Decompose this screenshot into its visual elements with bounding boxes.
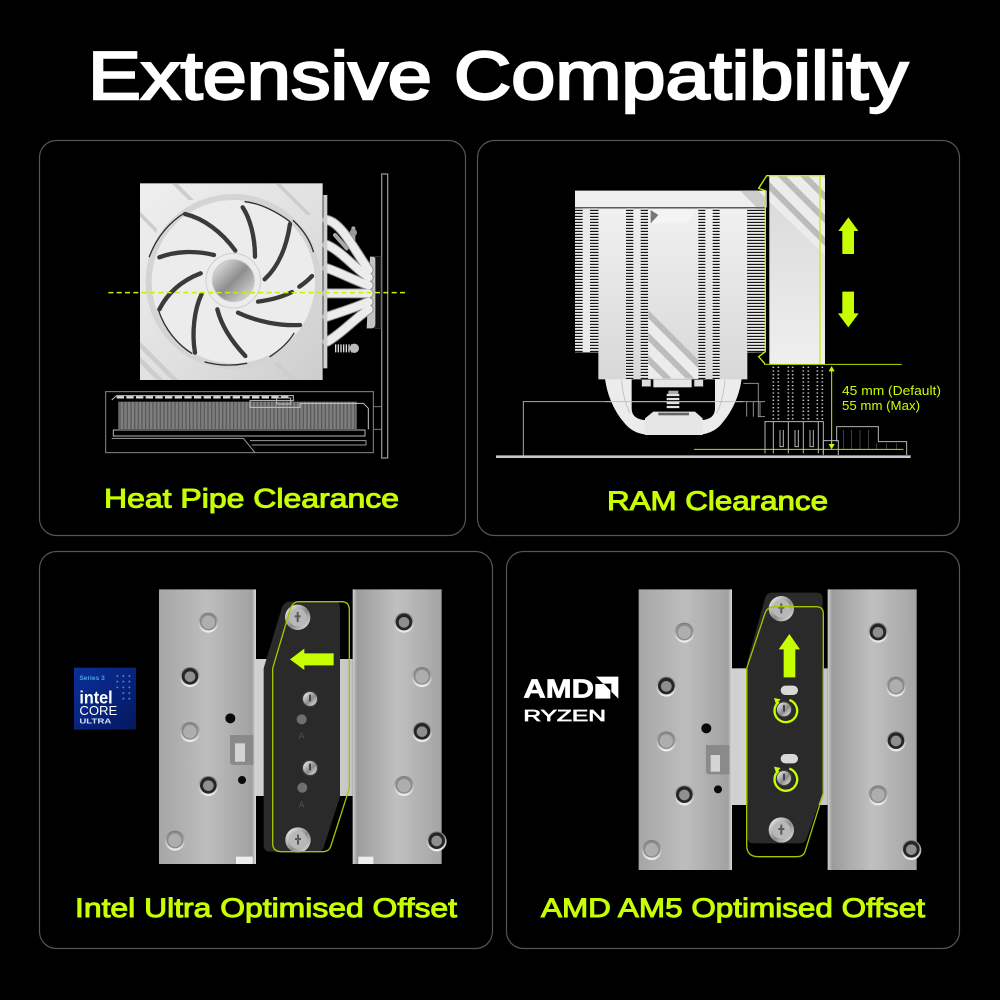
- illustration: Intel mounting bracket on heatsinks: [159, 589, 447, 864]
- dashed centre line: [108, 290, 408, 295]
- panel: RAM clearance: [478, 140, 960, 536]
- illustration: cooler side view with RAM clearance: [496, 176, 911, 457]
- fan frame: [140, 183, 323, 380]
- bracket details: A: [299, 731, 305, 741]
- logo: Intel Core Ultra: Series 3: [79, 675, 105, 682]
- clearance line: [694, 364, 903, 449]
- heatsink left: [159, 589, 256, 864]
- green outline of fan: [759, 176, 825, 364]
- logo: AMD Ryzen: RYZEN: [523, 708, 606, 725]
- heat pipes: [323, 195, 381, 368]
- green outline: [273, 602, 349, 852]
- heatsink left: [639, 589, 732, 870]
- label: AMD offset: AMD AM5 Optimised Offset: [541, 893, 926, 923]
- bridge: [255, 659, 353, 796]
- text: clearance values: 45 mm (Default): [842, 384, 941, 398]
- arrow: up: [838, 217, 858, 254]
- logo: Intel Core Ultra: ULTRA: [79, 719, 111, 726]
- motherboard edge outline: [382, 174, 388, 458]
- arrow: left: [290, 649, 334, 670]
- fan side block: [769, 176, 825, 364]
- label: heat pipe clearance: Heat Pipe Clearance: [104, 484, 399, 514]
- fin stack: [575, 208, 766, 387]
- motherboard wireframe: [496, 383, 911, 457]
- fan ring: [149, 197, 318, 366]
- panel: heat pipe clearance: [40, 140, 466, 536]
- mounting bracket: [747, 593, 823, 843]
- panel: Intel Ultra offset: [40, 552, 492, 948]
- logo: AMD Ryzen: AMD: [523, 673, 594, 703]
- illustration: AMD mounting bracket on heatsinks: [639, 589, 921, 870]
- illustration: cooler fan front view with GPU: [106, 174, 408, 458]
- arrow: up: [779, 634, 800, 677]
- bridge: [730, 668, 828, 805]
- logo: Intel Core Ultra: intel: [79, 688, 113, 708]
- text: clearance values: [842, 384, 941, 413]
- bracket details: [285, 605, 318, 853]
- GPU wireframe: [106, 392, 382, 453]
- bracket details: A: [299, 799, 305, 809]
- fan blades: [149, 202, 313, 365]
- logo: AMD Ryzen: [523, 673, 618, 725]
- arrow: height dimension: [829, 366, 835, 449]
- RAM pins dotted: [773, 367, 822, 420]
- heat pipes and mount: [605, 379, 743, 435]
- top plate: [575, 191, 767, 207]
- heatsink right: [828, 589, 921, 870]
- panel: AMD AM5 offset: [506, 552, 960, 948]
- fan hub: [206, 253, 261, 308]
- heatsink right: [353, 589, 447, 864]
- logo: Intel Core Ultra: [74, 668, 136, 730]
- label: Intel offset: Intel Ultra Optimised Offset: [75, 893, 458, 923]
- arrow: down: [838, 292, 859, 327]
- rotation markers: [774, 698, 797, 791]
- title: Extensive Compatibility: [88, 38, 908, 114]
- bracket details: [769, 596, 798, 843]
- green outline: [747, 607, 823, 857]
- text: clearance values: 55 mm (Max): [842, 399, 920, 413]
- mounting bracket: [264, 602, 340, 852]
- logo: Intel Core Ultra: CORE: [79, 703, 118, 718]
- label: RAM clearance: RAM Clearance: [607, 486, 828, 516]
